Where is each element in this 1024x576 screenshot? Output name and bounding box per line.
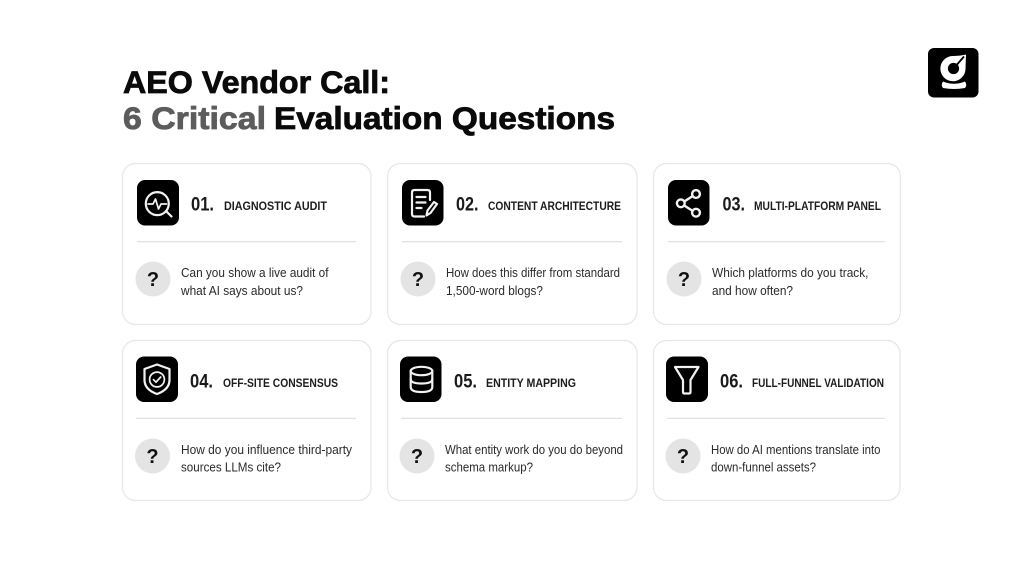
question text — [712, 266, 868, 298]
title: Evaluation Questions — [274, 100, 615, 136]
heading: 01: 01. — [191, 194, 214, 216]
icon: share nodes — [668, 180, 710, 226]
heading: 01 — [191, 194, 328, 216]
question text — [180, 266, 329, 298]
question text — [446, 266, 620, 298]
title: 6 Critical — [123, 100, 266, 136]
icon: magnifier with pulse — [137, 180, 179, 226]
panel: 05 entity mapping — [388, 340, 637, 500]
heading: 05: 05. — [454, 372, 477, 392]
question mark badge — [136, 262, 170, 296]
heading: 02 — [456, 194, 621, 216]
heading: 02: CONTENT ARCHITECTURE — [488, 199, 621, 213]
heading: 06 — [720, 372, 884, 392]
title: AEO Vendor Call: — [123, 64, 390, 100]
heading: 04 — [190, 372, 338, 392]
question mark badge: ? — [147, 269, 159, 291]
question mark badge — [400, 438, 434, 474]
question mark badge: ? — [677, 446, 689, 468]
heading: 06: 06. — [720, 372, 743, 392]
heading: 02: 02. — [456, 194, 478, 216]
icon: funnel — [666, 356, 708, 402]
question text — [181, 443, 353, 474]
title — [123, 64, 615, 136]
question text: How do you influence third-party — [181, 443, 353, 457]
question text: sources LLMs cite? — [181, 460, 281, 474]
question text: and how often? — [712, 284, 793, 298]
question mark badge — [666, 438, 700, 474]
question mark badge — [135, 438, 170, 474]
heading: 01: DIAGNOSTIC AUDIT — [224, 199, 328, 213]
heading: 04: OFF-SITE CONSENSUS — [223, 376, 338, 390]
icon: document with pencil — [402, 180, 444, 226]
panel: 01 diagnostic audit — [122, 164, 371, 324]
icon: brand logo — [928, 48, 978, 98]
question text — [445, 443, 623, 474]
question text: what AI says about us? — [180, 284, 303, 298]
question text: How do AI mentions translate into — [711, 443, 880, 457]
question text — [711, 443, 880, 474]
question mark badge — [666, 262, 702, 296]
question mark badge: ? — [411, 446, 423, 468]
question text: What entity work do you do beyond — [445, 443, 623, 457]
panel: 04 off-site consensus — [122, 340, 371, 500]
heading: 05: ENTITY MAPPING — [486, 376, 576, 390]
heading: 06: FULL-FUNNEL VALIDATION — [752, 376, 884, 390]
panel: 03 multi-platform panel — [654, 164, 900, 324]
question mark badge: ? — [412, 269, 424, 291]
question text: 1,500-word blogs? — [446, 284, 543, 298]
heading: 03: MULTI-PLATFORM PANEL — [754, 199, 881, 213]
heading: 04: 04. — [190, 372, 213, 392]
question mark badge: ? — [146, 446, 159, 468]
question text: Which platforms do you track, — [712, 266, 868, 280]
question text: Can you show a live audit of — [181, 266, 329, 280]
heading: 03 — [722, 194, 881, 216]
question mark badge — [400, 262, 436, 296]
heading: 05 — [454, 372, 576, 392]
panel: 06 full-funnel validation — [654, 340, 900, 500]
panel: 02 content architecture — [388, 164, 637, 324]
icon: database — [400, 356, 442, 402]
question text: How does this differ from standard — [446, 266, 620, 280]
heading: 03: 03. — [722, 194, 745, 216]
question text: down-funnel assets? — [711, 460, 816, 474]
question mark badge: ? — [678, 269, 690, 291]
icon: shield with check — [136, 356, 178, 402]
question text: schema markup? — [445, 460, 533, 474]
